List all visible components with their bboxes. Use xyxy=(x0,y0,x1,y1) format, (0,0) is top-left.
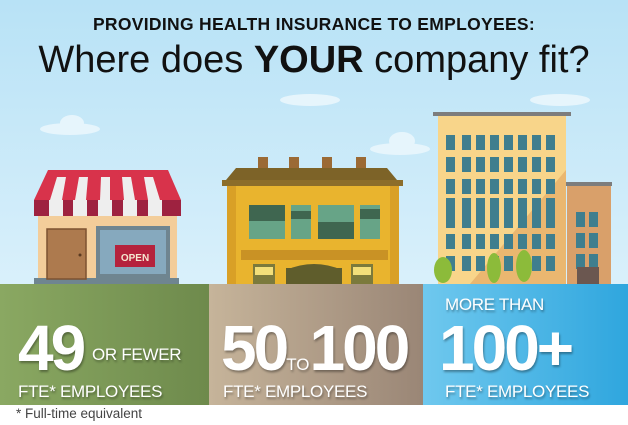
panel: more than 100: 100+ xyxy=(439,312,571,384)
title xyxy=(38,14,590,81)
victorian building xyxy=(222,157,403,284)
illustration: buildings xyxy=(34,112,612,284)
panel: more than 100: FTE* EMPLOYEES xyxy=(445,382,589,401)
panel: more than 100: MORE THAN xyxy=(445,295,544,314)
panel: 49 or fewer xyxy=(0,284,209,405)
panel: 49 or fewer: 49 xyxy=(18,312,83,384)
title: Where does YOUR company fit? xyxy=(38,39,590,81)
storefront: OPEN xyxy=(121,253,149,264)
clouds xyxy=(40,94,590,155)
sky background xyxy=(0,0,628,284)
panel: 50 to 100: 50TO100 xyxy=(221,312,407,384)
panel: 49 or fewer: FTE* EMPLOYEES xyxy=(18,382,162,401)
footnote: * Full-time equivalent xyxy=(16,406,142,421)
panel: 49 or fewer: OR FEWER xyxy=(92,345,181,364)
panel: 50 to 100 xyxy=(209,284,423,405)
tower xyxy=(433,112,612,284)
title: PROVIDING HEALTH INSURANCE TO EMPLOYEES: xyxy=(93,14,535,34)
panel: 50 to 100: FTE* EMPLOYEES xyxy=(223,382,367,401)
storefront xyxy=(34,170,181,308)
panel: more than 100 xyxy=(423,284,628,405)
